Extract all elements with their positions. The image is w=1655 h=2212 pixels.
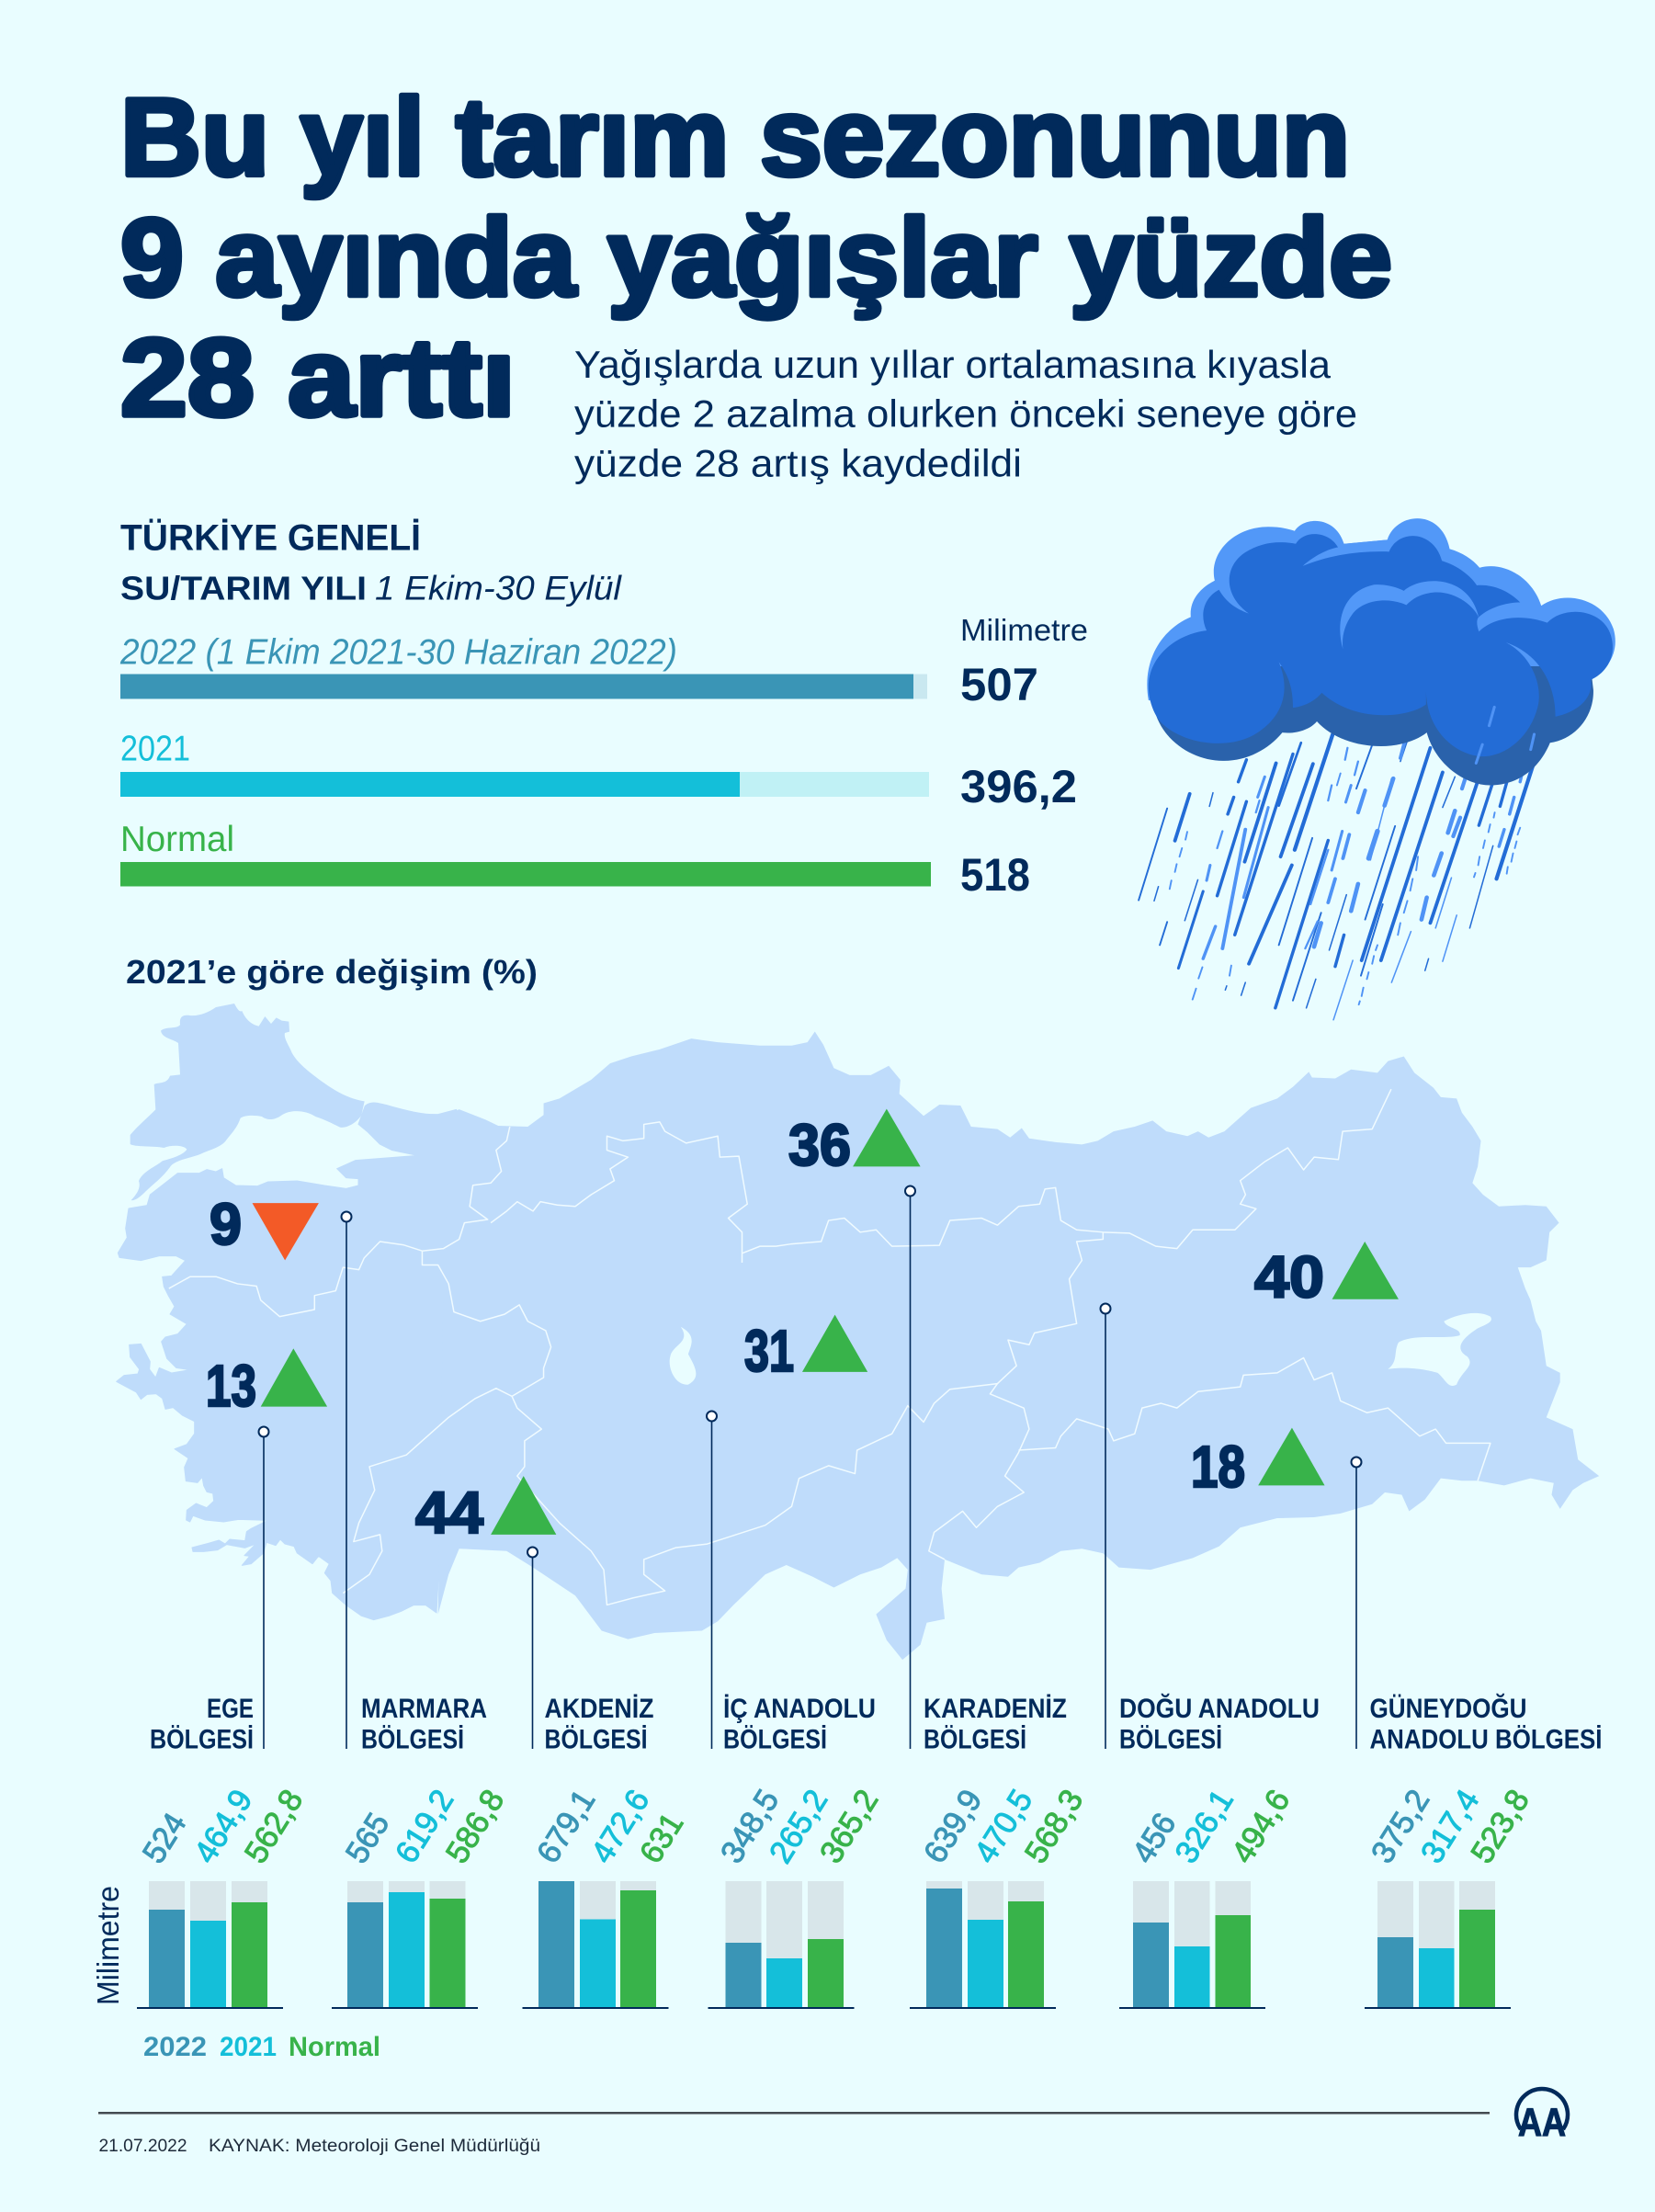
axis label: Milimetre: Milimetre — [91, 1886, 125, 2005]
value: İç Anadolu change: 31 — [744, 1318, 794, 1384]
chart: Ege: 464,9 — [187, 1784, 259, 1869]
water: Lake Van — [1388, 1313, 1491, 1386]
logo: AA: AA — [1518, 2101, 1566, 2145]
value: Güneydoğu change: 18 — [1191, 1434, 1245, 1500]
chart: Doğu Anadolu: 456 — [1126, 1807, 1183, 1869]
label: Ege Bölgesi — [150, 1694, 254, 1755]
label: Doğu Anadolu Bölgesi — [1119, 1693, 1320, 1755]
value: Doğu Anadolu change: 40 — [1254, 1244, 1324, 1310]
bar: 2021: 396,2 — [960, 761, 1077, 812]
label: Akdeniz Bölgesi: AKDENİZ — [544, 1694, 654, 1724]
label: Ege Bölgesi: BÖLGESİ — [150, 1724, 254, 1755]
subtitle: Yağışlarda uzun yıllar ortalamasına kıyasla — [574, 343, 1332, 386]
region: Thrace — [130, 1004, 365, 1200]
triangle up: Ege — [261, 1348, 327, 1407]
label: Marmara Bölgesi: BÖLGESİ — [361, 1724, 464, 1755]
chart: Akdeniz: 631 — [633, 1807, 690, 1869]
unit label: Milimetre — [960, 613, 1088, 647]
section heading: 1 Ekim-30 Eylül — [375, 570, 623, 607]
label: Ege Bölgesi: EGE — [207, 1694, 254, 1724]
map heading: 2021’e göre değişim (%) — [126, 953, 538, 991]
label: İç Anadolu Bölgesi — [723, 1694, 876, 1755]
subtitle — [574, 343, 1357, 485]
panel: Türkiye geneli bars — [119, 516, 1088, 901]
label: Güneydoğu Anadolu Bölgesi: GÜNEYDOĞU — [1369, 1693, 1527, 1724]
footer date and source: 21.07.2022 — [99, 2137, 187, 2156]
chart: Ege — [136, 1784, 310, 2009]
chart: Güneydoğu Anadolu: 523,8 — [1464, 1784, 1536, 1869]
leader lines — [259, 1185, 1362, 1749]
triangle up: Güneydoğu — [1258, 1428, 1325, 1485]
footer rule — [98, 2112, 1490, 2114]
region: north-west Anatolia and Aegean coast — [117, 1103, 457, 1620]
triangle up: Doğu Anadolu — [1332, 1242, 1399, 1299]
chart: Doğu Anadolu: 494,6 — [1225, 1784, 1297, 1869]
label: Karadeniz Bölgesi: BÖLGESİ — [924, 1724, 1026, 1755]
chart: Marmara: 565 — [339, 1807, 396, 1869]
label: Güneydoğu Anadolu Bölgesi: ANADOLU BÖLGESİ — [1369, 1724, 1603, 1755]
label: Akdeniz Bölgesi — [544, 1694, 654, 1755]
triangle down: Marmara — [253, 1203, 319, 1260]
triangle up: Akdeniz — [491, 1476, 556, 1535]
bar: 2022 — [119, 632, 1038, 710]
label: Doğu Anadolu Bölgesi: DOĞU ANADOLU — [1119, 1693, 1320, 1724]
bar: 2022: 2022 (1 Ekim 2021-30 Haziran 2022) — [119, 632, 677, 673]
icon: rain cloud — [1139, 518, 1615, 1020]
label: Marmara Bölgesi: MARMARA — [361, 1694, 487, 1724]
chart: Marmara — [332, 1784, 511, 2009]
map of Turkey — [117, 1004, 1599, 1660]
chart: Marmara: 586,8 — [439, 1784, 511, 1869]
chart: İç Anadolu: 365,2 — [813, 1784, 885, 1869]
legend: Normal — [289, 2032, 380, 2062]
chart: İç Anadolu — [708, 1784, 885, 2009]
chart: Karadeniz — [910, 1784, 1090, 2009]
label: Güneydoğu Anadolu Bölgesi — [1369, 1693, 1603, 1755]
section heading: SU/TARIM YILI — [120, 570, 367, 607]
triangle up: Karadeniz — [853, 1109, 921, 1166]
legend: 2022 — [143, 2032, 207, 2062]
footer date and source: KAYNAK: Meteoroloji Genel Müdürlüğü — [209, 2137, 540, 2156]
label: Akdeniz Bölgesi: BÖLGESİ — [544, 1724, 647, 1755]
title — [120, 75, 1392, 439]
water: Lake Tuz — [670, 1327, 696, 1385]
chart: Akdeniz — [522, 1784, 690, 2009]
bar: normal — [120, 820, 1030, 901]
chart: Doğu Anadolu — [1119, 1784, 1297, 2009]
chart: Karadeniz: 568,3 — [1018, 1784, 1090, 1869]
chart: Karadeniz: 470,5 — [968, 1784, 1039, 1869]
subtitle: yüzde 2 azalma olurken önceki seneye göre — [574, 391, 1357, 436]
chart: İç Anadolu: 348,5 — [714, 1784, 786, 1869]
bar: 2021 — [120, 730, 1077, 812]
triangle up: İç Anadolu — [802, 1315, 867, 1372]
subtitle: yüzde 28 artış kaydedildi — [574, 441, 1022, 485]
value: Karadeniz change: 36 — [788, 1112, 851, 1178]
label: İç Anadolu Bölgesi: BÖLGESİ — [723, 1724, 827, 1755]
value: Ege change: 13 — [206, 1353, 256, 1419]
value: Akdeniz change: 44 — [415, 1480, 483, 1546]
chart: Ege: 524 — [136, 1807, 193, 1869]
chart: Karadeniz: 639,9 — [917, 1784, 989, 1869]
chart: Marmara: 619,2 — [389, 1784, 460, 1869]
label: İç Anadolu Bölgesi: İÇ ANADOLU — [723, 1694, 876, 1724]
logo: AA — [1516, 2089, 1568, 2145]
label: Doğu Anadolu Bölgesi: BÖLGESİ — [1119, 1724, 1222, 1755]
footer date and source — [99, 2137, 540, 2156]
bar: normal: Normal — [120, 820, 234, 859]
chart: Akdeniz: 472,6 — [584, 1784, 656, 1869]
value: Marmara change: 9 — [210, 1191, 242, 1257]
chart: İç Anadolu: 265,2 — [763, 1784, 834, 1869]
section heading: TÜRKİYE GENELİ — [120, 516, 421, 559]
bar: 2021: 2021 — [120, 730, 190, 768]
bar: 2022: 507 — [960, 659, 1038, 710]
chart: Akdeniz: 679,1 — [530, 1784, 602, 1869]
chart: Güneydoğu Anadolu — [1365, 1784, 1536, 2009]
label: Marmara Bölgesi — [361, 1694, 487, 1755]
chart: Güneydoğu Anadolu: 375,2 — [1365, 1784, 1436, 1869]
chart: Ege: 562,8 — [238, 1784, 310, 1869]
country shape — [369, 1031, 1599, 1660]
chart: Güneydoğu Anadolu: 317,4 — [1414, 1784, 1486, 1869]
title: 28 arttı — [120, 316, 516, 439]
label: Karadeniz Bölgesi — [924, 1694, 1067, 1755]
label: Karadeniz Bölgesi: KARADENİZ — [924, 1694, 1067, 1724]
legend — [143, 2032, 380, 2062]
chart: Doğu Anadolu: 326,1 — [1168, 1784, 1241, 1869]
bar: normal: 518 — [960, 849, 1030, 901]
section heading — [120, 516, 623, 607]
legend: 2021 — [220, 2032, 277, 2062]
title: Bu yıl tarım sezonunun — [120, 75, 1350, 199]
title: 9 ayında yağışlar yüzde — [120, 197, 1392, 320]
